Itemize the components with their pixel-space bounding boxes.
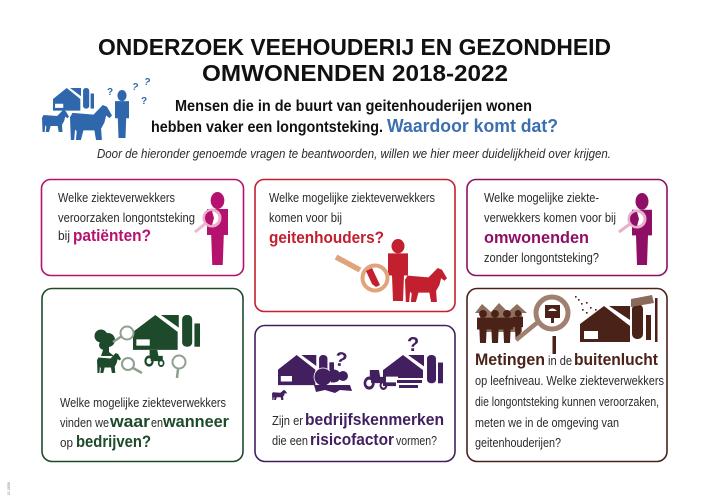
text: bedrijven question: waar — [109, 413, 151, 431]
text: bedrijfskenmerken question: vormen? — [396, 434, 437, 448]
panel: patiënten — [42, 180, 244, 276]
text: geitenhouders question: Welke mogelijke ziekteverwekkers — [269, 191, 435, 205]
icon: farms with trees, tractor, dog and question marks: ? — [332, 348, 349, 372]
icon: farm, goats and person with question marks — [42, 76, 151, 140]
text: geitenhouders question — [269, 191, 435, 247]
text: omwonenden question: zonder longontsteking? — [484, 251, 599, 265]
text: buitenlucht description — [475, 350, 664, 450]
text: buitenlucht description: die longontsteking kunnen veroorzaken, — [475, 395, 659, 409]
icon: farm, goats and person with question marks: ? — [141, 96, 147, 107]
text: buitenlucht description: Metingen — [475, 350, 545, 369]
text: bedrijven question: op — [60, 436, 73, 450]
document code: 01 2658 — [7, 482, 11, 495]
icon: houses with people, magnifier, farm and emission stack — [475, 295, 658, 354]
text: bedrijven question: Welke mogelijke ziekteverwekkers — [60, 396, 226, 410]
text: bedrijven question: wanneer — [162, 413, 230, 431]
text: omwonenden question: Welke mogelijke ziekte- — [484, 191, 599, 205]
panel: buitenlucht — [467, 288, 667, 462]
text: buitenlucht description: meten we in de omgeving van — [475, 416, 619, 430]
text: bedrijven question: bedrijven? — [76, 433, 151, 451]
text: patiënten question: bij — [58, 229, 70, 243]
icon: farm, goats and person with question marks: ? — [131, 81, 139, 94]
intro sentence: Door de hieronder genoemde vragen te beantwoorden, willen we hier meer duidelijkheid over krijgen. — [97, 147, 611, 161]
text: buitenlucht description: geitenhouderijen? — [475, 436, 561, 450]
icon: farm, goats and person with question marks: ? — [107, 87, 113, 98]
subtitle: hebben vaker een longontsteking. — [151, 119, 383, 136]
icon: farm, tree, goat, tractor and magnifiers — [94, 315, 200, 378]
text: geitenhouders question: komen voor bij — [269, 211, 342, 225]
text: patiënten question — [58, 191, 195, 245]
text: omwonenden question — [484, 191, 616, 265]
text: bedrijfskenmerken question: risicofactor — [310, 431, 395, 449]
subtitle: Mensen die in de buurt van geitenhouderijen wonen — [175, 98, 532, 115]
text: bedrijfskenmerken question — [272, 411, 444, 449]
text: buitenlucht description: op leefniveau. Welke ziekteverwekkers — [475, 374, 664, 388]
text: omwonenden question: omwonenden — [484, 229, 589, 247]
text: bedrijfskenmerken question: Zijn er — [272, 414, 303, 428]
title: ONDERZOEK VEEHOUDERIJ EN GEZONDHEID — [98, 34, 611, 60]
text: patiënten question: patiënten? — [73, 227, 151, 245]
icon: person with magnifier — [195, 192, 228, 265]
title: OMWONENDEN 2018-2022 — [202, 60, 508, 86]
text: bedrijfskenmerken question: die een — [272, 434, 308, 448]
panel: bedrijven — [42, 288, 243, 462]
subtitle: Waardoor komt dat? — [387, 116, 558, 136]
text: bedrijven question: en — [151, 416, 163, 430]
icon: farms with trees, tractor, dog and question marks — [272, 334, 443, 400]
text: omwonenden question: verwekkers komen voor bij — [484, 211, 616, 225]
text: bedrijven question — [60, 396, 230, 451]
panel: bedrijfskenmerken — [255, 326, 455, 462]
text: patiënten question: veroorzaken longontsteking — [58, 211, 195, 225]
panel: omwonenden — [467, 180, 667, 276]
subtitle — [151, 98, 558, 136]
panel: geitenhouders — [255, 180, 455, 312]
text: bedrijven question: vinden we — [60, 416, 109, 430]
icon: farm, goats and person with question marks: ? — [143, 76, 151, 89]
icon: magnifier with test tube, person and goat — [336, 239, 447, 302]
title — [98, 34, 611, 86]
text: buitenlucht description: buitenlucht — [574, 350, 658, 369]
text: buitenlucht description: in de — [548, 354, 572, 368]
text: patiënten question: Welke ziekteverwekkers — [58, 191, 175, 205]
text: bedrijfskenmerken question: bedrijfskenmerken — [305, 411, 444, 429]
text: geitenhouders question: geitenhouders? — [269, 229, 384, 247]
icon: person with magnifier — [619, 193, 652, 265]
icon: farms with trees, tractor, dog and question marks: ? — [407, 334, 419, 356]
